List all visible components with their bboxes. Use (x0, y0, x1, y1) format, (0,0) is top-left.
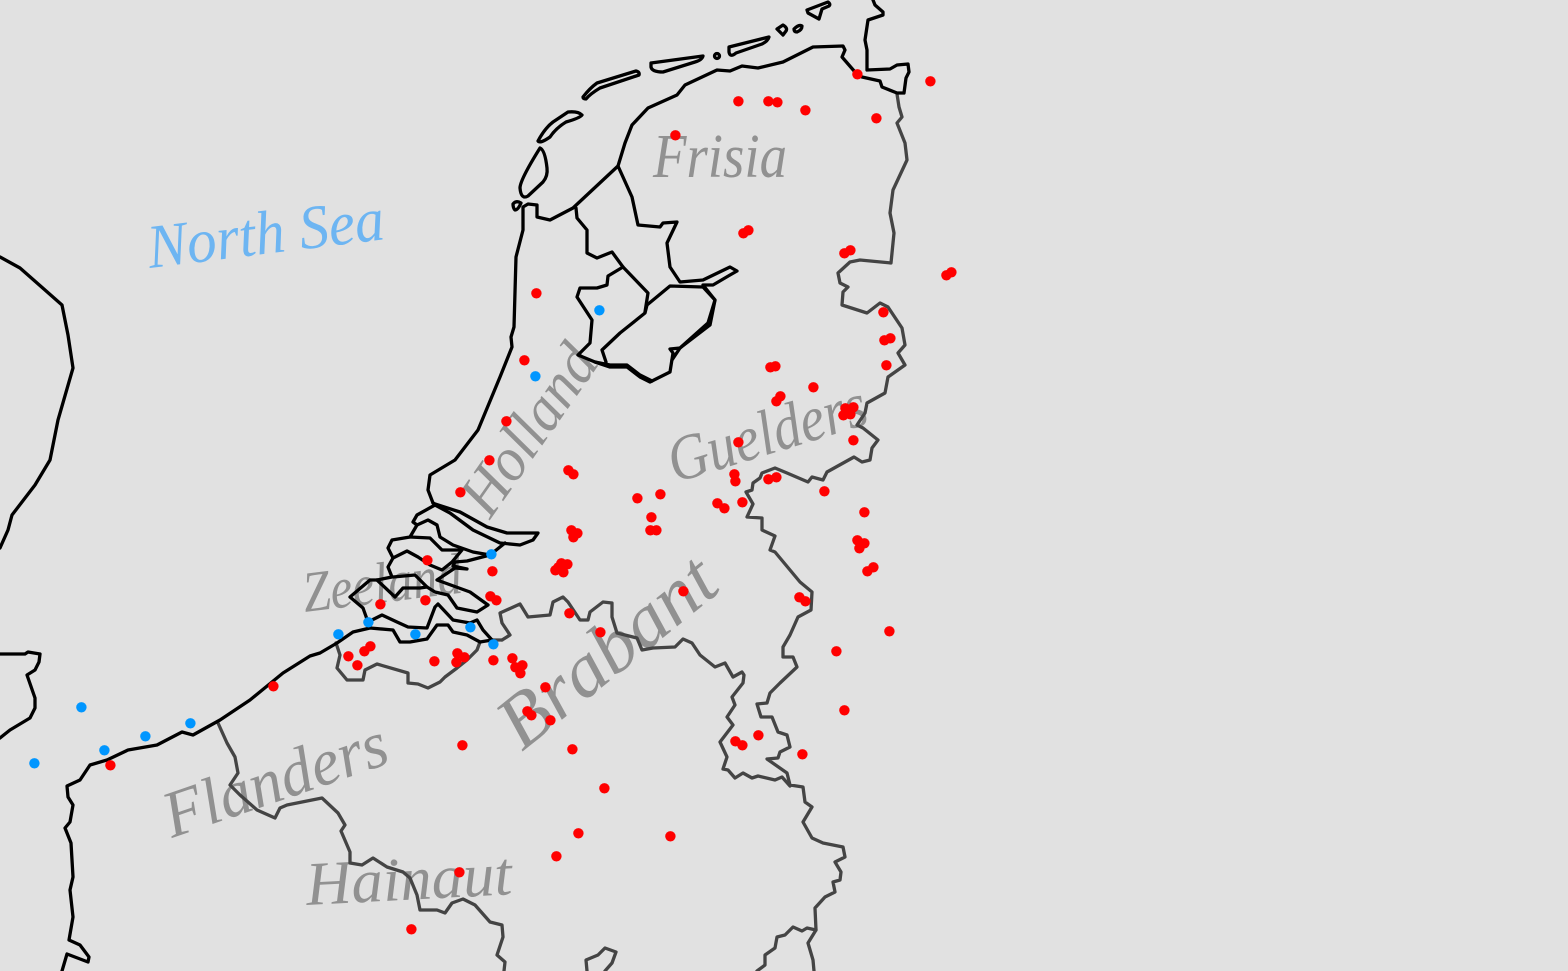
label: Brabant: Brabant (480, 536, 735, 765)
label: Holland: Holland (445, 331, 612, 529)
region labels (142, 123, 875, 919)
label: Guelders: Guelders (658, 369, 875, 496)
coastline and rivers (black) (0, 0, 909, 971)
coast: England north (0, 257, 73, 548)
coast: England south (0, 652, 40, 738)
blue markers (29, 305, 605, 768)
red markers (105, 69, 957, 935)
Zeeland delta (377, 503, 538, 580)
label: Hainaut: Hainaut (303, 840, 515, 919)
Zuiderzee shores (576, 208, 715, 382)
Frisian islands (520, 148, 547, 197)
label: North Sea: North Sea (142, 185, 388, 282)
coast: Zeeland to France (62, 625, 492, 971)
label: Flanders: Flanders (152, 707, 397, 853)
label: Frisia: Frisia (652, 123, 787, 191)
coast: Holland to Frisia (428, 0, 909, 503)
label: Zeeland: Zeeland (299, 541, 466, 625)
inland borders (dark grey) (218, 94, 907, 971)
